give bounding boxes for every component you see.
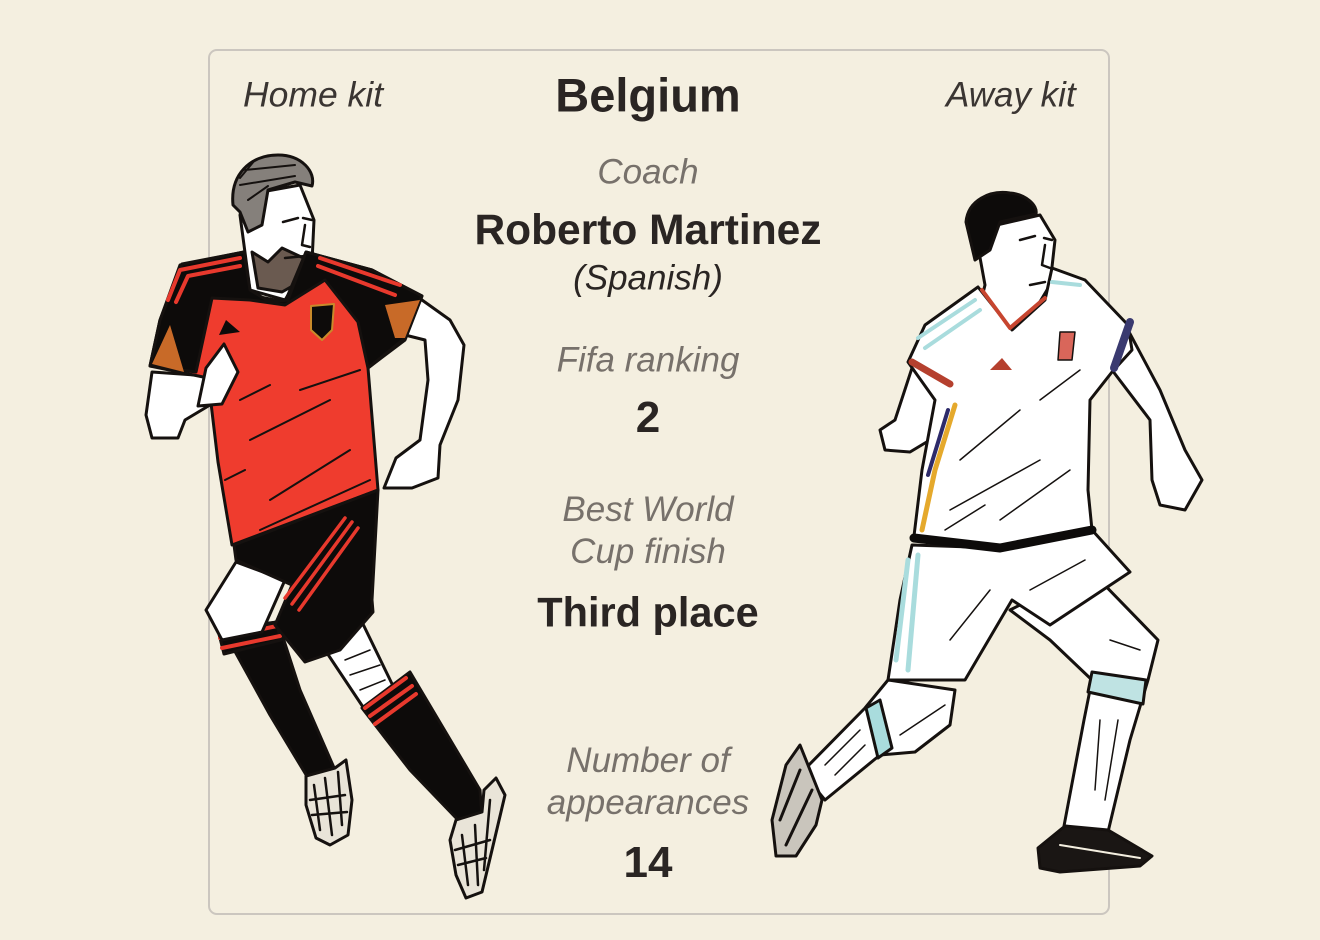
left leg and boot: [772, 680, 955, 856]
best finish label: Cup finish: [570, 532, 726, 571]
best finish label: Best World: [562, 490, 734, 529]
best finish label: [562, 490, 734, 571]
neck and head: [966, 192, 1055, 335]
coach name: Roberto Martinez: [474, 207, 822, 254]
coach nationality: (Spanish): [573, 258, 723, 298]
label: home kit: Home kit: [243, 74, 383, 114]
appearances label: Number of: [566, 741, 730, 780]
card frame: [208, 49, 1110, 915]
appearances value: 14: [624, 838, 672, 887]
white shirt: [908, 268, 1132, 548]
right arm: [384, 295, 464, 488]
title: Belgium: [555, 68, 741, 122]
thigh: [206, 562, 285, 640]
black shorts: [234, 490, 378, 662]
hand over shirt: [198, 344, 238, 406]
right arm: [1112, 330, 1202, 510]
label: away kit: Away kit: [946, 76, 1076, 114]
ranking value: 2: [636, 393, 660, 442]
neck and head: [233, 155, 314, 300]
best finish value: Third place: [537, 588, 759, 635]
ranking label: Fifa ranking: [557, 340, 739, 380]
appearances label: [547, 741, 749, 822]
appearances label: appearances: [547, 783, 749, 822]
coach label: Coach: [597, 152, 699, 192]
left arm: [880, 368, 950, 452]
left arm: [146, 345, 238, 438]
red shirt: [150, 252, 422, 545]
back leg and boot: [219, 622, 352, 845]
white shorts: [888, 530, 1130, 680]
front leg and boot: [325, 622, 505, 898]
right leg and boot: [1010, 570, 1158, 872]
